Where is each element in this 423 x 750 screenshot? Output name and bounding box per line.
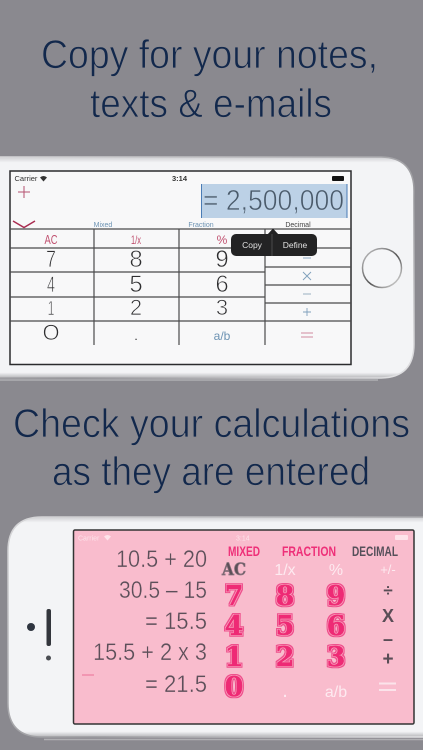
operator keys: – xyxy=(383,629,393,649)
phone: white landscape with pink calculator xyxy=(8,517,423,740)
copy define popup: Copy xyxy=(242,240,263,250)
mode labels xyxy=(94,222,311,229)
keypad keys: 5 xyxy=(129,271,143,298)
keypad keys: 6 xyxy=(215,271,229,298)
sensor xyxy=(46,656,51,660)
number keys: 1 xyxy=(225,642,243,673)
operator keys: X xyxy=(382,606,394,626)
pink dash xyxy=(82,674,94,676)
number keys: 9 xyxy=(327,581,345,612)
keypad keys xyxy=(42,232,231,345)
keypad keys: % xyxy=(217,233,228,247)
number keys: 8 xyxy=(276,581,294,612)
light function keys xyxy=(274,562,396,702)
selected result display: = 2,500,000 xyxy=(203,185,344,217)
number keys: 5 xyxy=(276,611,294,642)
keypad keys: 9 xyxy=(215,246,229,273)
operator keys: + xyxy=(382,649,394,670)
number keys: 3 xyxy=(327,642,345,673)
keypad keys: AC xyxy=(44,232,58,247)
light function keys: . xyxy=(282,680,288,702)
number keys: 7 xyxy=(225,581,243,612)
number keys xyxy=(225,581,345,703)
calculation history: = 21.5 xyxy=(145,671,207,698)
status bar xyxy=(14,174,344,183)
keypad grid xyxy=(10,229,351,345)
status bar: 3:14 xyxy=(172,174,188,183)
operator keys xyxy=(382,581,394,670)
mode labels: Decimal xyxy=(285,222,311,229)
status bar: 3:14 xyxy=(236,536,250,542)
light function keys: % xyxy=(329,562,343,579)
lower lip of phone xyxy=(44,738,423,740)
operator keys: ÷ xyxy=(383,581,393,600)
light function keys: 1/x xyxy=(274,562,296,579)
mode labels xyxy=(228,543,398,559)
keypad keys: a/b xyxy=(214,329,231,343)
title: copy for your notes: texts & e-mails xyxy=(90,82,332,126)
copy define popup: Define xyxy=(283,240,308,250)
keypad keys: 2 xyxy=(130,295,142,320)
plus icon xyxy=(18,186,30,198)
chevron xyxy=(13,221,35,228)
AC key: AC xyxy=(221,560,246,580)
title: copy for your notes xyxy=(41,33,378,126)
number keys: 2 xyxy=(276,642,294,673)
keypad keys: 4 xyxy=(47,272,55,297)
phone body xyxy=(8,517,423,737)
status bar xyxy=(78,535,408,542)
speaker xyxy=(46,609,51,646)
status bar: Carrier xyxy=(14,174,38,183)
title: check your calculations: Check your calculations xyxy=(13,402,410,446)
calculation history: 30.5 – 15 xyxy=(119,577,207,604)
mode labels: DECIMAL xyxy=(352,543,398,559)
keypad keys: 8 xyxy=(129,246,143,273)
status bar: Carrier xyxy=(78,536,100,542)
mode labels: FRACTION xyxy=(282,543,336,559)
operator keys xyxy=(301,258,313,337)
calculator screen xyxy=(10,171,351,364)
light function keys: a/b xyxy=(325,684,347,701)
title: copy for your notes: Copy for your notes, xyxy=(41,33,378,77)
home button xyxy=(362,248,402,288)
title: check your calculations: as they are entered xyxy=(52,450,370,494)
mode labels: MIXED xyxy=(228,543,260,559)
lower lip of phone xyxy=(0,379,378,381)
keypad keys: . xyxy=(134,329,138,343)
front camera xyxy=(27,623,35,631)
calculation history: = 15.5 xyxy=(145,608,207,635)
light function keys: +/- xyxy=(380,562,396,577)
copy define popup xyxy=(231,228,317,256)
keypad keys: 7 xyxy=(46,246,56,273)
keypad keys: 1/x xyxy=(131,233,141,247)
keypad keys: 3 xyxy=(216,295,228,320)
pink calculator screen xyxy=(74,530,414,724)
title: check your calculations xyxy=(13,402,410,494)
calculation history: 10.5 + 20 xyxy=(116,546,207,573)
keypad keys: 1 xyxy=(48,298,54,320)
calculation history xyxy=(93,546,207,698)
keypad keys: O xyxy=(42,320,60,345)
phone: white landscape with standard calculator xyxy=(0,157,414,380)
number keys: 4 xyxy=(225,611,243,642)
mode labels: Fraction xyxy=(188,222,214,229)
equals key xyxy=(379,684,396,690)
phone body xyxy=(0,157,414,378)
number keys: 0 xyxy=(225,672,243,703)
number keys: 6 xyxy=(327,611,345,642)
calculation history: 15.5 + 2 x 3 xyxy=(93,639,207,666)
mode labels: Mixed xyxy=(94,222,112,229)
